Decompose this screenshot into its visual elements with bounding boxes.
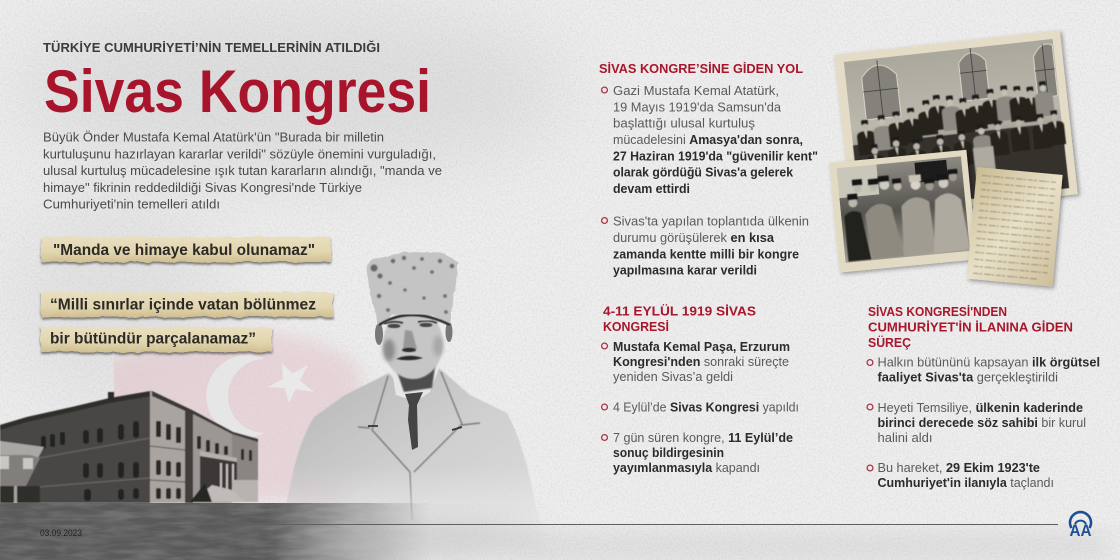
brows and eyes: [384, 321, 437, 324]
string courses: [0, 438, 185, 490]
bullet 2: Heyeti Temsiliye, ülkenin kaderinde: [878, 400, 1083, 415]
bullet 3: [867, 460, 1054, 490]
shirt collar: [393, 368, 439, 398]
intro paragraph: Cumhuriyeti'nin temelleri atıldı: [43, 197, 220, 212]
heading: [868, 304, 1073, 350]
handwritten document: [967, 167, 1063, 286]
left wall: [0, 391, 150, 503]
intro paragraph: ulusal kurtuluş mücadelesine ışık tutan kararların alındığı, "manda ve: [43, 163, 442, 178]
footer rule: [40, 524, 1058, 526]
portico and stairs: [200, 453, 237, 490]
main title: Sivas Kongresi: [44, 58, 431, 125]
bullet 2: yapılmasına karar verildi: [613, 263, 757, 278]
bullet 3: [602, 430, 793, 475]
subtitle: TÜRKİYE CUMHURİYETİ’NİN TEMELLERİNİN ATILDIĞI: [43, 40, 380, 55]
lapels: [358, 372, 480, 520]
quote strip 1: [41, 237, 331, 262]
bullet 2: Sivas'ta yapılan toplantıda ülkenin: [613, 214, 809, 229]
bullet 1: 19 Mayıs 1919'da Samsun'da: [613, 99, 782, 114]
intro paragraph: himaye" fikrinin reddedildiği Sivas Kongresi'nde Türkiye: [43, 180, 362, 195]
flag crescent: [206, 355, 265, 437]
building: Sivas Congress hall: [0, 391, 258, 503]
section: Sivas Kongresi'ne giden yol: [599, 61, 818, 278]
bullet 1: başlattığı ulusal kurtuluş: [613, 116, 756, 131]
bullet 1: yeniden Sivas’a geldi: [613, 369, 733, 384]
photo: delegates group portrait: [834, 30, 1078, 219]
coat: [286, 368, 535, 514]
bullet 2: birinci derecede söz sahibi bir kurul: [878, 415, 1086, 430]
bullet 3: Bu hareket, 29 Ekim 1923'te: [878, 460, 1040, 475]
kalpak fur hat: [366, 252, 458, 325]
bullet 2: halini aldı: [878, 430, 932, 445]
intro paragraph: kurtuluşunu hazırlayan kararlar verildi" sözüyle önemini vurguladığı,: [43, 146, 436, 161]
intro paragraph: [43, 130, 442, 212]
photo: Atatürk with officers: [829, 150, 977, 272]
facade: [150, 391, 258, 503]
bullet 1: olarak gördüğü Sivas'a gelerek: [613, 165, 794, 180]
bullet 3: 7 gün süren kongre, 11 Eylül’de: [613, 430, 793, 445]
bullet 2: zamanda kentte milli bir kongre: [613, 246, 799, 261]
neck and chin shadow: [396, 366, 436, 393]
face: [383, 309, 443, 379]
bullet 2: 4 Eylül’de Sivas Kongresi yapıldı: [613, 400, 799, 415]
section: Sivas Kongresi'nden Cumhuriyet'in ilanına giden süreç: [867, 304, 1100, 490]
heading: SÜREÇ: [868, 335, 912, 350]
bullet 2: durumu görüşülerek en kısa: [613, 230, 775, 245]
bullet 1: devam ettirdi: [613, 181, 690, 196]
heading: 4-11 EYLÜL 1919 SİVAS: [603, 304, 756, 319]
left wing: [0, 441, 44, 458]
ground fading into the page: [0, 503, 430, 560]
handwriting lines: [973, 176, 1056, 280]
bullet 2: [867, 400, 1086, 445]
officers in long coats: [841, 168, 970, 262]
bullet 1: Kongresi'nden sonraki süreçte: [613, 354, 789, 369]
bullet 1: [602, 339, 790, 384]
bullet 1: [602, 83, 818, 196]
flag star: [268, 363, 314, 403]
heading: SİVAS KONGRE’SİNE GİDEN YOL: [599, 61, 803, 76]
quote strip 2: “Milli sınırlar içinde vatan bölünmez: [50, 296, 316, 314]
section: 4-11 Eylül 1919 Sivas Kongresi: [602, 304, 799, 475]
bullet 3: sonuç bildirgesinin: [613, 445, 724, 460]
Anadolu Agency logo: [1070, 512, 1092, 540]
bullet 2: [602, 214, 809, 278]
bullet 1: Gazi Mustafa Kemal Atatürk,: [613, 83, 779, 98]
nose: [403, 330, 417, 351]
quote strip 1: "Manda ve himaye kabul olunamaz": [53, 242, 315, 259]
bullet 3: yayımlanmasıyla kapandı: [613, 460, 760, 475]
quote strip 3: bir bütündür parçalanamaz”: [50, 330, 256, 348]
date: 03.09.2023: [40, 528, 82, 538]
bullet 1: Mustafa Kemal Paşa, Erzurum: [613, 339, 790, 354]
bullet 3: Cumhuriyet'in ilanıyla taçlandı: [878, 475, 1054, 490]
mustache: [396, 356, 423, 360]
windows in the wall: [860, 43, 1058, 120]
quote strip 3: [41, 327, 272, 352]
bullet 1: 27 Haziran 1919'da "güvenilir kent": [613, 148, 818, 163]
cheek shading: [383, 339, 395, 361]
windows, left wall: [41, 421, 139, 501]
heading: [603, 304, 756, 334]
heading: KONGRESİ: [603, 319, 669, 334]
bullet 1: mücadelesini Amasya'dan sonra,: [613, 132, 803, 147]
soft grey smudge under the portrait: [300, 522, 540, 558]
bullet 1: Halkın bütününü kapsayan ilk örgütsel: [878, 355, 1100, 370]
Turkish flag, faded: [100, 332, 362, 500]
Anadolu Agency logo: AA: [1070, 521, 1092, 540]
quote strip 2: [41, 292, 333, 317]
bullet 1: [867, 355, 1100, 385]
intro paragraph: Büyük Önder Mustafa Kemal Atatürk'ün "Burada bir milletin: [43, 130, 384, 144]
portrait of Mustafa Kemal Atatürk: [286, 252, 535, 520]
windows, facade: [156, 421, 252, 499]
bullet 1: faaliyet Sivas'ta gerçekleştirildi: [878, 370, 1058, 385]
tie: [405, 392, 423, 450]
seated and standing delegates: [848, 79, 1071, 211]
heading: CUMHURİYET'İN İLANINA GİDEN: [868, 319, 1073, 334]
heading: SİVAS KONGRESİ'NDEN: [868, 304, 1007, 319]
